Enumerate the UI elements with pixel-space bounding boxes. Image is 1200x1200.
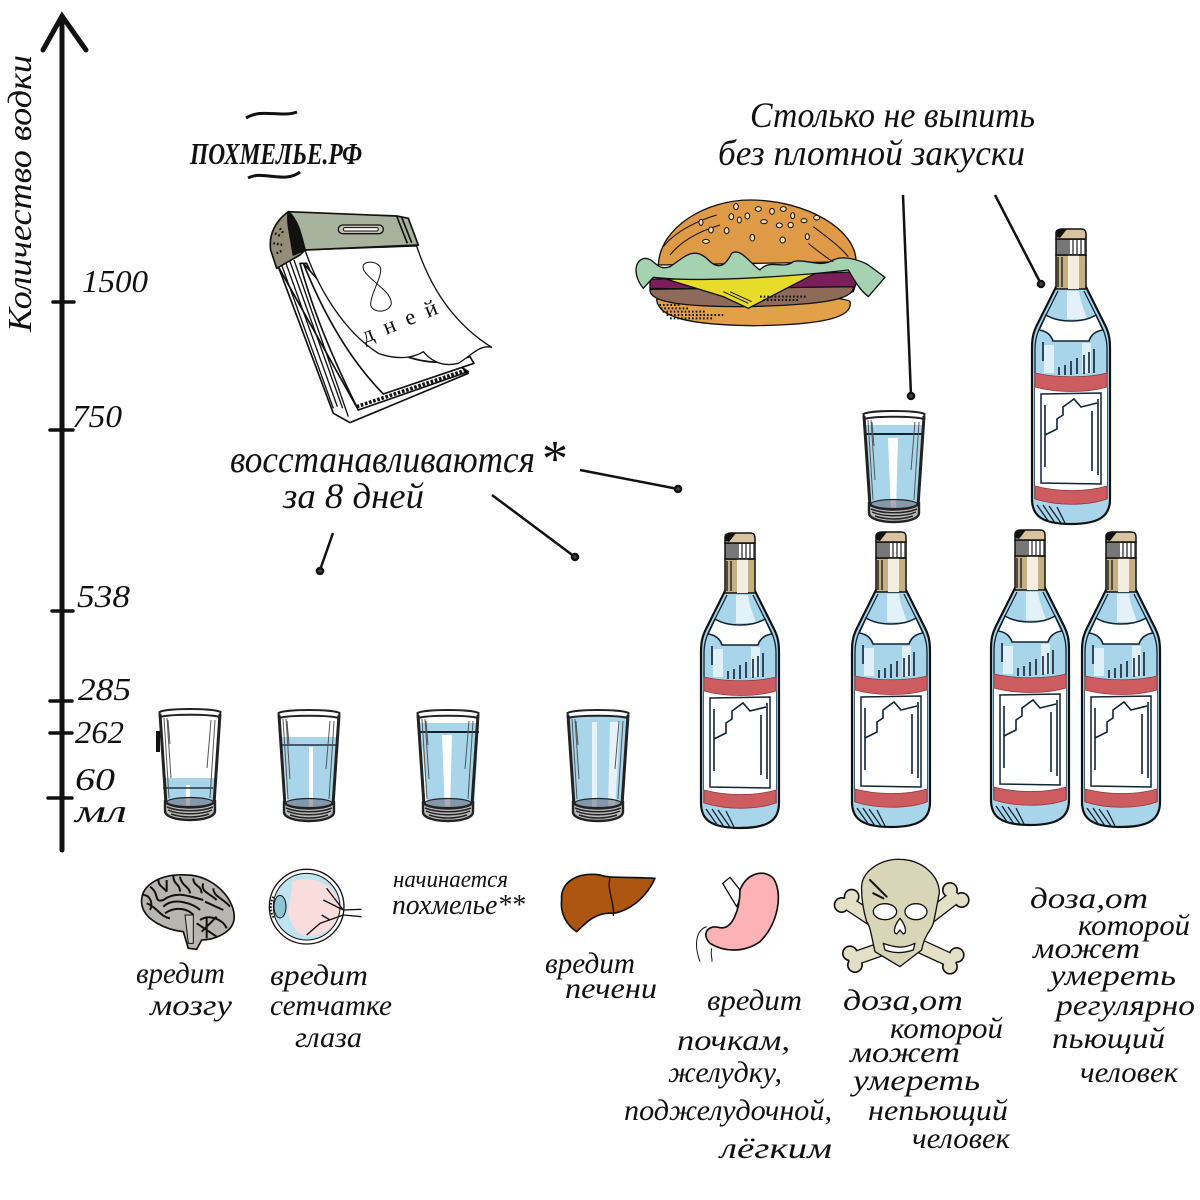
glass: 538 ml — [568, 710, 628, 821]
text: brain: вредит — [136, 957, 225, 990]
text: skull: умереть — [849, 1064, 980, 1097]
text: regular drinker: человек — [1080, 1056, 1179, 1089]
text: eye: глаза — [295, 1021, 362, 1054]
text: note top: без плотной закуски — [718, 133, 1025, 173]
text: hangover — [392, 867, 525, 921]
site name — [189, 112, 362, 178]
icon: calendar: дней — [357, 295, 441, 348]
text: skull: доза,от — [843, 984, 963, 1017]
site name: ПОХМЕЛЬЕ.РФ — [189, 136, 362, 171]
axis values: 285 — [78, 671, 131, 707]
axis values: 60 — [75, 761, 115, 797]
text: skull: может — [849, 1036, 960, 1069]
icon: burger — [636, 200, 885, 326]
text: regular drinker: доза,от — [1030, 882, 1148, 915]
text: note top: Столько не выпить — [750, 95, 1035, 135]
text: eye: сетчатке — [270, 989, 392, 1022]
text: stomach — [624, 984, 832, 1165]
axis title: Количество водки — [2, 55, 39, 333]
axis values: 1500 — [82, 263, 148, 299]
text: liver — [545, 947, 657, 1005]
text: recover: * — [542, 431, 568, 488]
glass: 262 ml — [278, 710, 340, 821]
text: regular drinker: регулярно — [1054, 989, 1195, 1022]
text: recover: восстанавливаются — [230, 439, 535, 481]
text: skull: человек — [912, 1122, 1011, 1155]
text: regular drinker: которой — [1078, 909, 1190, 942]
text: stomach: почкам, — [677, 1024, 790, 1057]
text: regular drinker: умереть — [1047, 959, 1176, 992]
text: skull — [843, 984, 1011, 1155]
icon: eye — [269, 869, 362, 944]
glass: 750 ml top — [864, 411, 924, 522]
text: recover — [230, 431, 568, 516]
text: stomach: поджелудочной, — [624, 1094, 832, 1127]
text: liver: вредит — [545, 947, 635, 980]
text: brain — [136, 957, 233, 1022]
text: regular drinker — [1030, 882, 1195, 1089]
icon: liver — [561, 874, 655, 932]
text: eye: вредит — [270, 959, 368, 992]
text: skull: непьющий — [868, 1094, 1008, 1127]
icon: brain — [142, 875, 234, 949]
bottles — [701, 229, 1160, 828]
text: eye — [270, 959, 392, 1054]
text: note top — [718, 95, 1035, 173]
text: skull: которой — [890, 1012, 1003, 1045]
text: regular drinker: пьющий — [1052, 1022, 1165, 1055]
icon: stomach — [697, 873, 778, 962]
text: liver: печени — [565, 972, 657, 1005]
axis values — [72, 263, 148, 829]
axis values: мл — [73, 793, 127, 829]
leader lines — [317, 195, 1044, 574]
axis values: 538 — [77, 578, 130, 614]
glass: 285 ml — [418, 710, 479, 821]
icon: calendar — [270, 212, 492, 423]
axis values: 750 — [72, 398, 122, 434]
text: stomach: лёгким — [717, 1132, 832, 1165]
axis values: 262 — [75, 714, 124, 750]
icon: skull — [834, 859, 970, 975]
text: stomach: вредит — [707, 984, 802, 1017]
text: stomach: желудку, — [668, 1056, 782, 1089]
text: hangover: похмелье** — [392, 890, 525, 921]
y axis — [43, 16, 86, 850]
text: brain: мозгу — [149, 989, 233, 1022]
text: hangover: начинается — [393, 867, 508, 893]
text: regular drinker: может — [1032, 932, 1140, 965]
text: recover: за 8 дней — [282, 476, 424, 516]
glass: 60 ml — [158, 709, 220, 820]
